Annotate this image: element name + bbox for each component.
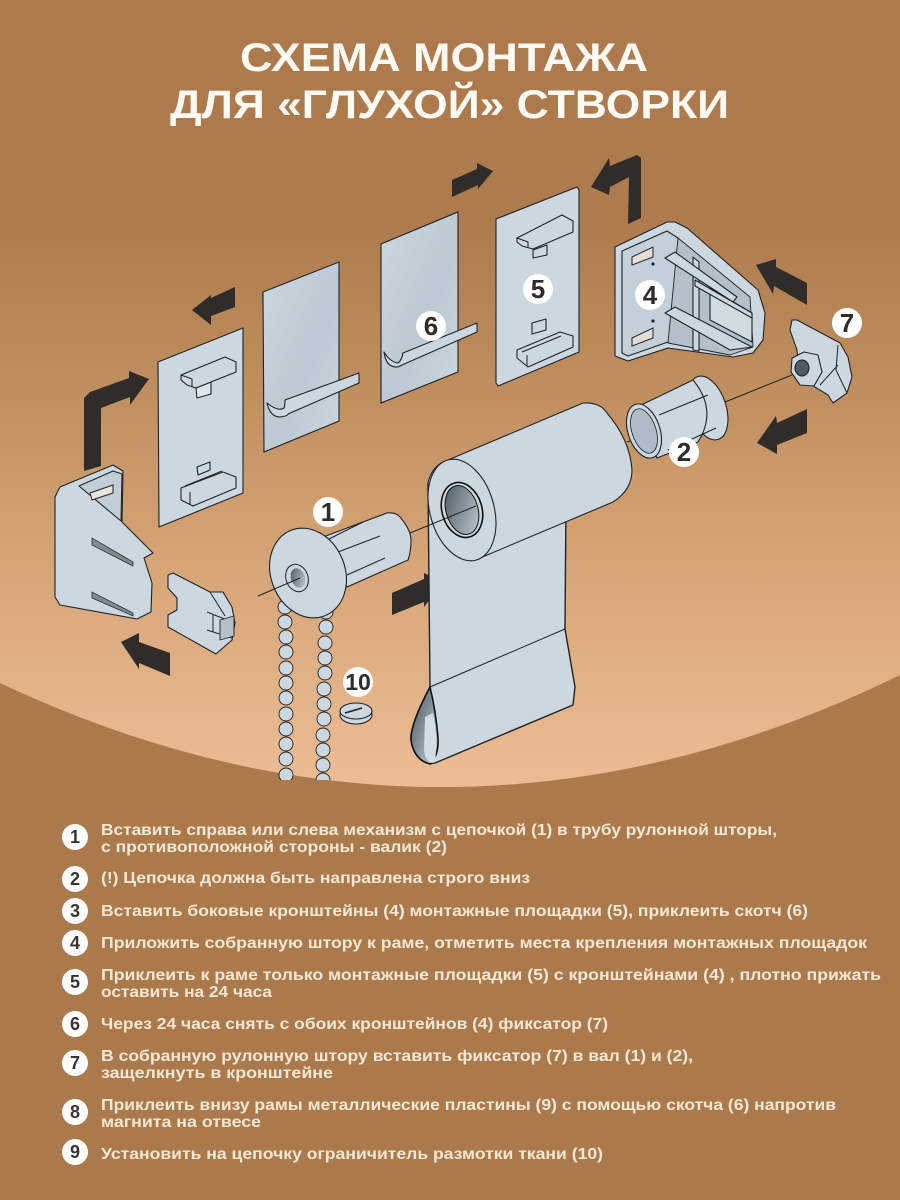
badge 4: 4 xyxy=(643,280,658,310)
badge 7: 7 xyxy=(840,308,854,338)
step 2 xyxy=(62,866,530,892)
arrow: to roller 2 xyxy=(757,409,807,454)
step 1 xyxy=(62,822,777,856)
arrow: to fabric tube xyxy=(392,573,443,615)
step 5: Приклеить к раме только монтажные площадки (5) с кронштейнами (4) , плотно прижать xyxy=(101,967,881,984)
stopper 10 xyxy=(340,703,372,724)
step 3: Вставить боковые кронштейны (4) монтажные площадки (5), приклеить скотч (6) xyxy=(101,903,808,920)
step 1: Вставить справа или слева механизм с цепочкой (1) в трубу рулонной шторы, xyxy=(101,822,777,839)
step 8: магнита на отвесе xyxy=(101,1114,261,1131)
badge 6: 6 xyxy=(424,311,438,341)
arrow: to bracket 4 xyxy=(756,259,807,305)
badge 1: 1 xyxy=(321,497,335,527)
badge 10: 10 xyxy=(345,669,371,695)
step 9: 9 xyxy=(70,1142,80,1162)
tube xyxy=(428,403,632,558)
step 4: Приложить собранную штору к раме, отметить места крепления монтажных площадок xyxy=(101,935,868,952)
step 8 xyxy=(62,1097,836,1131)
badge 7 xyxy=(832,308,862,338)
adhesive tape right xyxy=(381,212,477,403)
step 4: 4 xyxy=(70,933,80,953)
badge 6 xyxy=(416,311,446,341)
arrow: top middle xyxy=(452,163,493,197)
arrow: top right L-shaped xyxy=(591,155,641,224)
mounting plate left xyxy=(158,328,243,527)
step 9: Установить на цепочку ограничитель размотки ткани (10) xyxy=(101,1146,603,1163)
step 5: оставить на 24 часа xyxy=(101,984,272,1001)
title: ДЛЯ «ГЛУХОЙ» СТВОРКИ xyxy=(170,81,729,127)
exploded assembly diagram xyxy=(55,155,862,787)
badge 5: 5 xyxy=(531,274,545,304)
step 2: 2 xyxy=(70,869,80,889)
step 6: Через 24 часа снять с обоих кронштейнов (4) фиксатор (7) xyxy=(101,1016,608,1033)
title: СХЕМА МОНТАЖА xyxy=(240,36,648,80)
step 7: защелкнуть в кронштейне xyxy=(101,1065,333,1082)
instruction list xyxy=(62,822,881,1165)
step 5 xyxy=(62,967,881,1001)
step 6: 6 xyxy=(70,1014,80,1034)
step 6 xyxy=(62,1011,608,1037)
step 3: 3 xyxy=(70,901,80,921)
teardrop fold xyxy=(411,687,438,764)
step 1: 1 xyxy=(70,827,80,847)
step 7: В собранную рулонную штору вставить фиксатор (7) в вал (1) и (2), xyxy=(101,1048,693,1065)
number badges on diagram xyxy=(313,274,862,697)
roller plug 2 xyxy=(620,371,792,463)
side bracket left xyxy=(55,465,153,619)
bead chain xyxy=(278,600,333,787)
step 7 xyxy=(62,1048,693,1082)
step 3 xyxy=(62,898,808,924)
side bracket 4 xyxy=(615,222,765,361)
step 5: 5 xyxy=(70,972,80,992)
step 1: с противоположной стороны - валик (2) xyxy=(101,839,447,856)
badge 5 xyxy=(523,274,553,304)
title xyxy=(170,36,729,127)
arrow: top left xyxy=(192,287,235,325)
step 8: 8 xyxy=(70,1102,80,1122)
badge 2: 2 xyxy=(677,437,691,467)
arrow: left L-shaped up xyxy=(84,371,149,471)
badge 4 xyxy=(635,280,665,310)
badge 2 xyxy=(669,437,699,467)
step 4 xyxy=(62,930,868,956)
fabric sheet xyxy=(411,483,575,764)
step 8: Приклеить внизу рамы металлические пластины (9) с помощью скотча (6) напротив xyxy=(101,1097,836,1114)
step 7: 7 xyxy=(70,1053,80,1073)
step 2: (!) Цепочка должна быть направлена строго вниз xyxy=(101,870,530,887)
fixator 7 xyxy=(790,320,852,403)
fixator left xyxy=(168,573,235,654)
badge 1 xyxy=(313,497,343,527)
arrow: to left bracket xyxy=(121,633,170,676)
chain mechanism 1 xyxy=(256,513,411,630)
step 9 xyxy=(62,1139,603,1165)
adhesive tape left xyxy=(263,262,359,452)
mounting plate right xyxy=(496,187,579,386)
fabric roller xyxy=(410,403,632,764)
